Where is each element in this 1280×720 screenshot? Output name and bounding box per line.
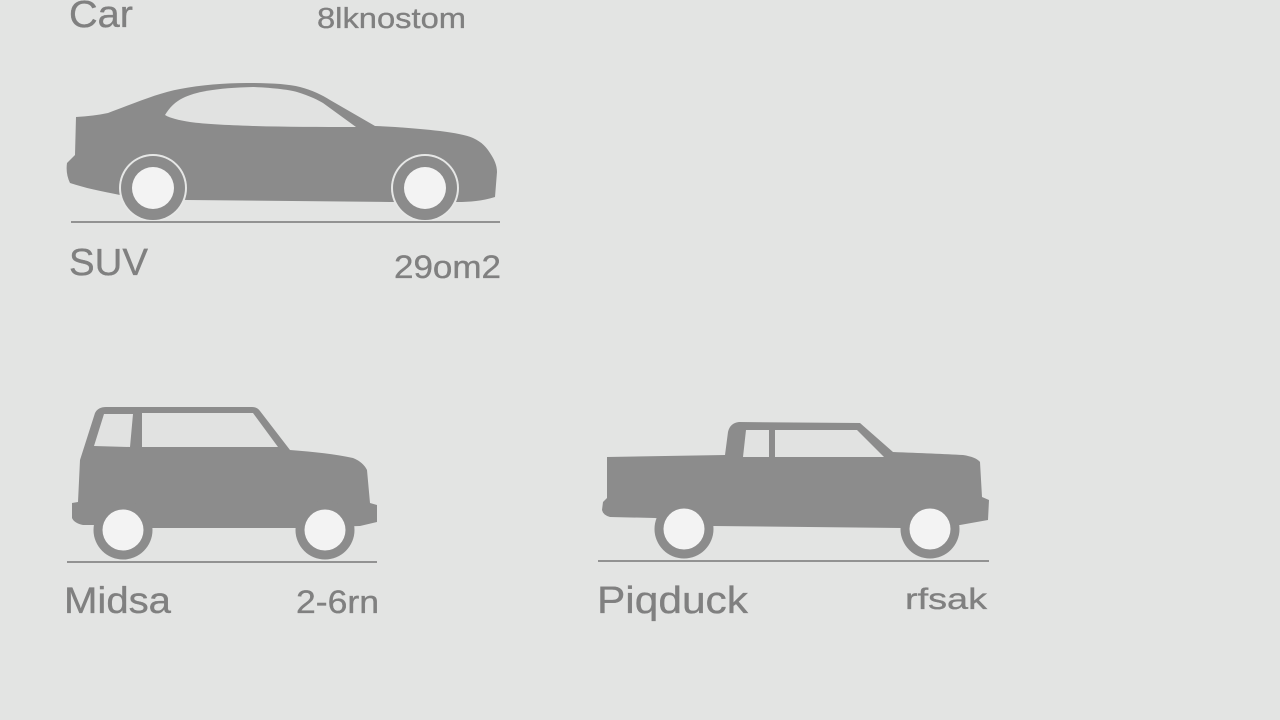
front side window: SUV	[142, 413, 278, 447]
rear side window: pickup	[743, 430, 769, 457]
label: SUV: SUV	[69, 242, 149, 284]
front side window: pickup	[775, 430, 884, 457]
rear side window: SUV	[94, 414, 133, 447]
label: Piqduck: Piqduck	[597, 580, 749, 622]
front wheel: SUV	[296, 500, 354, 560]
window: sedan	[165, 87, 356, 127]
rear wheel: SUV	[94, 500, 152, 560]
front wheel: sedan	[391, 154, 459, 222]
front wheel: pickup	[900, 500, 960, 558]
icon: SUV	[72, 407, 377, 560]
label: Midsa: Midsa	[64, 580, 171, 621]
value: SUV measurement: 29om2	[394, 249, 501, 285]
rear wheel: pickup	[654, 500, 714, 558]
rear wheel: sedan	[119, 154, 187, 222]
value: midsize measurement: 2-6rn	[296, 584, 379, 620]
icon: pickup truck	[602, 422, 989, 558]
icon: sedan car	[67, 83, 497, 222]
value: pickup measurement: rfsak	[905, 583, 988, 616]
value: car measurement: 8lknostom	[317, 3, 466, 35]
